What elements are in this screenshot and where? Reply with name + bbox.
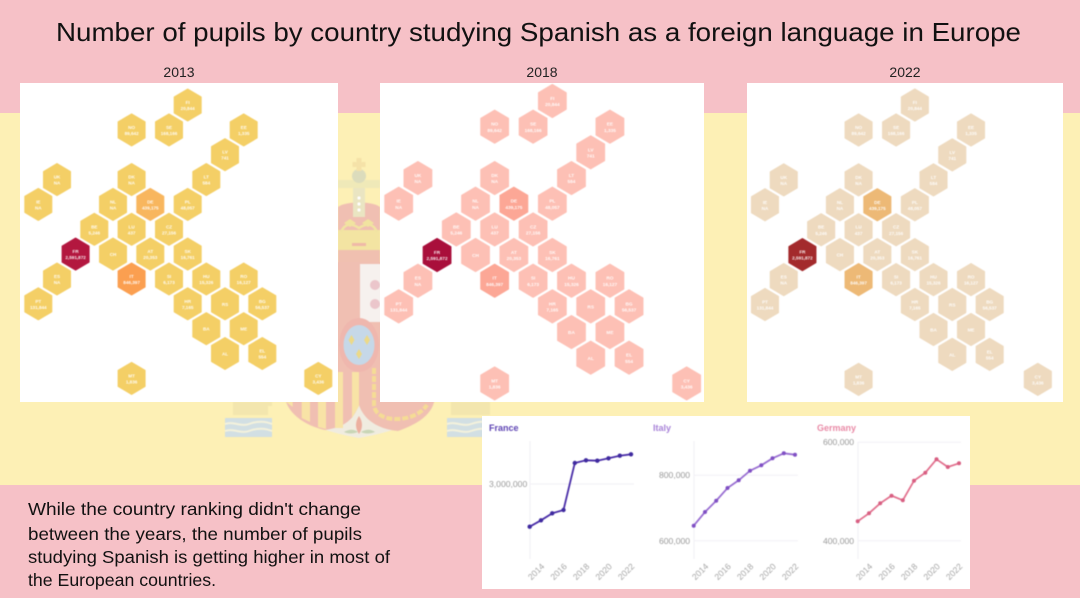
hex map: 2018 — [385, 85, 700, 400]
hex map: 2022: DE — [874, 200, 881, 205]
chart title: France: France — [489, 423, 519, 433]
hex map: 2013: 27,156 — [162, 230, 176, 235]
hex map: 2022: 1,836 — [853, 380, 865, 385]
hex map: 2022: ES — [781, 275, 787, 280]
hex map: 2018: 437 — [491, 231, 499, 237]
hex map: 2013: BA — [203, 327, 210, 332]
hex map: 2018: LU — [492, 224, 498, 230]
hex map: 2022: BG — [986, 300, 994, 305]
x axis labels: Italy: 2016 — [712, 561, 733, 582]
hex map: 2022: 741 — [948, 156, 957, 161]
hex map: 2022: ME — [968, 328, 974, 333]
hex map: 2018: NA — [415, 282, 422, 288]
hex map: 2013: 1,335 — [238, 131, 250, 136]
hex map: 2022: AT — [874, 250, 880, 255]
hex map: 2022: HU — [930, 275, 937, 280]
hex map: 2022: SI — [894, 275, 898, 280]
title: Number of pupils by country studying Spanish as a foreign language in Europe — [56, 17, 1021, 47]
hex map: 2022: 89,642 — [852, 131, 866, 136]
hex map: 2018: 439,175 — [505, 205, 523, 211]
hex map: 2013: 15,326 — [199, 280, 214, 285]
hex map: 2022: IE — [763, 200, 767, 205]
hex map: 2013: 554 — [258, 354, 267, 360]
hex map: 2022: 6,173 — [890, 281, 902, 286]
hex map: 2022: 16,761 — [908, 256, 922, 261]
hex map: 2022: NA — [855, 181, 863, 186]
hex map: 2018: CH — [472, 253, 480, 259]
watermark: Spanish coat of arms — [225, 158, 494, 438]
chart: Germany — [817, 423, 965, 582]
axis label: 600,000: 600,000 — [659, 536, 690, 546]
hex map: 2018: 584 — [568, 179, 576, 185]
hex map: 2022 — [752, 89, 1051, 395]
text block: conclusion: between the years, the number of pupils — [28, 524, 362, 544]
hex map: 2013: NA — [110, 205, 117, 210]
hex map: 2018: NL — [472, 199, 479, 205]
x axis labels: Italy — [690, 561, 801, 582]
hex map: 2018: 56,537 — [622, 308, 637, 314]
hex map: 2022: 2,591,872 — [792, 256, 813, 261]
x axis labels: France: 2022 — [616, 561, 637, 582]
hex map: 2022: AL — [949, 352, 956, 357]
panel: 2018 background — [380, 83, 704, 402]
hex map: 2022: 15,326 — [926, 281, 941, 286]
hex map: 2018: SI — [531, 276, 535, 282]
axis label: 800,000: 800,000 — [659, 470, 690, 480]
hex map: 2013: 741 — [221, 156, 229, 161]
hex map: 2022: LU — [856, 225, 862, 230]
hex map: 2018: AL — [588, 356, 594, 362]
axis label: 3,000,000: 3,000,000 — [489, 479, 527, 489]
hex map: 2018: LV — [588, 147, 594, 153]
hex map: 2022: EL — [987, 349, 993, 354]
hex map: 2013: 1,836 — [126, 379, 138, 384]
hex map: 2013: NA — [54, 181, 61, 186]
axis label: 600,000: 600,000 — [823, 437, 854, 447]
hex map: 2013: RS — [222, 302, 228, 307]
hex map: 2013: SE — [166, 125, 172, 130]
hex map: 2018: 48,057 — [545, 205, 560, 211]
hex map: 2022: 584 — [930, 181, 938, 186]
hex map: 2018: 20,844 — [545, 102, 560, 108]
hex map: 2018: FR — [434, 250, 441, 256]
hex map: 2018: 16,761 — [545, 256, 560, 262]
hex map: 2022: PL — [912, 200, 918, 205]
hex map: 2018: NA — [395, 205, 403, 211]
hex map: 2022: LV — [949, 150, 956, 155]
hex map: 2022: DK — [855, 175, 863, 180]
hex map: 2013: ME — [240, 327, 247, 332]
hex map: 2022: MT — [855, 374, 862, 379]
hex map: 2022: 27,156 — [889, 231, 904, 236]
hex map: 2018: DE — [511, 199, 517, 205]
hex map: 2022: 20,353 — [870, 256, 885, 261]
hex map: 2018: EL — [626, 353, 632, 359]
hex map: 2018: CY — [683, 378, 691, 384]
hex map: 2018: BE — [453, 224, 460, 230]
hex map: 2022: 131,844 — [757, 306, 774, 311]
hex map: 2022: NA — [780, 281, 788, 286]
x axis labels: Italy: 2018 — [735, 561, 756, 582]
hex map: 2013: 439,175 — [142, 205, 159, 210]
x axis labels: Germany: 2014 — [854, 561, 875, 582]
hex map: 2022: RS — [949, 303, 955, 308]
hex map: 2013: PT — [35, 299, 41, 304]
hex map: 2013: CH — [110, 252, 117, 257]
hex map: 2022: NA — [762, 206, 769, 211]
hex map: 2018: NA — [491, 179, 499, 185]
hex map: 2018: BG — [626, 301, 633, 307]
hex map: 2013: RO — [240, 274, 248, 279]
pomegranate tip — [356, 416, 362, 434]
hex map: 2022: EE — [968, 125, 974, 130]
hex map: 2018: IE — [396, 199, 401, 205]
line: Italy series — [692, 451, 797, 528]
hex map: 2013: 3,436 — [313, 379, 324, 384]
hex map: 2013: CZ — [166, 224, 172, 229]
hex map: 2022: 439,175 — [869, 206, 886, 211]
centre oval — [339, 318, 379, 372]
chart title: Italy: Italy — [653, 423, 671, 433]
hex map: 2022: 1,335 — [965, 131, 977, 136]
hex map: 2018: LT — [569, 173, 574, 179]
hex map: 2018: 1,836 — [489, 385, 501, 391]
hex map: 2018: IT — [493, 276, 497, 282]
hex map: 2013: 584 — [202, 181, 211, 186]
hex map: 2013: IE — [36, 199, 40, 204]
hex map: 2018: 741 — [587, 153, 595, 160]
hex map: 2013: SK — [185, 249, 192, 254]
hex map: 2022: NA — [780, 181, 788, 186]
panel: 2013 background — [20, 83, 338, 402]
hex map: 2013: NO — [128, 125, 135, 130]
hex map: 2013: BG — [259, 299, 266, 304]
hex map: 2013: 2,591,872 — [65, 255, 86, 260]
x axis labels: Italy: 2022 — [780, 561, 801, 582]
hex map: 2022: CY — [1035, 374, 1041, 379]
hex map: 2018: UK — [415, 173, 422, 179]
x axis labels: Italy: 2020 — [757, 561, 778, 582]
heading: 2018: 2018 — [526, 64, 558, 80]
hex map: 2018: EE — [607, 122, 613, 128]
hex map: 2013: 846,397 — [123, 280, 140, 285]
shield outline — [285, 262, 435, 438]
hex map: 2022: 168,166 — [888, 131, 905, 136]
x axis labels: Germany: 2020 — [921, 561, 942, 582]
hex map: 2022: FI — [913, 100, 917, 105]
hex map: 2018: 3,436 — [681, 385, 693, 391]
hex map: 2022: IT — [857, 275, 861, 280]
hex map: 2018: 1,335 — [604, 128, 616, 134]
hex map: 2013: CY — [315, 373, 321, 378]
hex map: 2013: 48,057 — [181, 205, 195, 210]
hex map: 2018: ME — [606, 330, 613, 336]
hex map: 2022: 56,537 — [983, 306, 997, 311]
hex map: 2013: LU — [129, 224, 135, 229]
hex map: 2013: 16,127 — [237, 280, 251, 285]
hex map: 2013: DK — [128, 175, 136, 180]
x axis labels: Germany: 2016 — [876, 561, 897, 582]
chart: France — [489, 423, 637, 582]
hex map: 2013: 7,165 — [182, 305, 194, 310]
hex map: 2018: FI — [550, 96, 554, 102]
hex map: 2013: NA — [35, 205, 42, 210]
hex map: 2022: 3,436 — [1032, 380, 1044, 385]
right pillar base — [451, 402, 490, 415]
hex map: 2022: PT — [762, 300, 768, 305]
hex map: 2013: PL — [185, 199, 191, 204]
hex map: 2018: 2,591,872 — [427, 256, 448, 262]
x axis labels: Germany — [854, 561, 965, 582]
hex map: 2013: 56,537 — [255, 305, 270, 310]
hex map: 2022: 5,246 — [815, 231, 827, 236]
hex map: 2013: DE — [147, 199, 153, 204]
hex map: 2022: 48,057 — [908, 206, 922, 211]
hex map: 2018: 168,166 — [525, 128, 542, 134]
hex map: 2022: 437 — [855, 231, 863, 236]
line: France series — [528, 452, 633, 529]
hex map: 2013: 131,844 — [30, 305, 47, 310]
panel: 2022 background — [747, 83, 1063, 402]
hex map: 2018: NA — [472, 205, 480, 211]
hex map: 2018: HU — [568, 276, 575, 282]
hex map: 2018: 7,165 — [546, 308, 559, 314]
x axis labels: Germany: 2022 — [944, 561, 965, 582]
hex map: 2018: BA — [568, 330, 575, 336]
text block: conclusion: studying Spanish is getting higher in most of — [28, 547, 390, 567]
hex map: 2018: DK — [491, 173, 499, 179]
hex map: 2013: AT — [147, 249, 153, 254]
left pillar base — [233, 402, 272, 415]
hex map: 2013: 5,246 — [89, 230, 100, 235]
hex map: 2022: 7,165 — [909, 306, 921, 311]
hex map: 2013: 16,761 — [181, 255, 195, 260]
hex map: 2013: EL — [259, 348, 265, 354]
x axis labels: France — [526, 561, 637, 582]
x axis labels: France: 2018 — [571, 561, 592, 582]
hex map: 2013: LT — [204, 175, 209, 180]
shield left stripes — [285, 262, 359, 430]
hex map: 2013: 437 — [128, 230, 136, 235]
x axis labels: Italy: 2014 — [690, 561, 711, 582]
hex map: 2018: 5,246 — [450, 231, 463, 237]
hex map: 2018: SE — [530, 122, 536, 128]
hex map: 2013: 6,173 — [163, 280, 175, 285]
x axis labels: Germany: 2018 — [899, 561, 920, 582]
hex map: 2018: 27,156 — [526, 231, 541, 237]
hex map: 2022: NO — [855, 125, 862, 130]
hex map: 2018: ES — [415, 276, 421, 282]
x axis labels: France: 2014 — [526, 561, 547, 582]
hex map: 2018: HR — [549, 301, 556, 307]
hex map: 2013: UK — [54, 175, 61, 180]
hex map: 2022: SE — [893, 125, 899, 130]
hex map: 2013: 20,353 — [143, 255, 158, 260]
hex map: 2013: SI — [167, 274, 171, 279]
hex map: 2022: FR — [799, 250, 806, 255]
hex map: 2018: 15,326 — [564, 282, 579, 288]
hex map: 2022: 554 — [986, 355, 994, 360]
hex map: 2022: NA — [837, 206, 844, 211]
hex map: 2013: BE — [91, 224, 97, 229]
heading: 2022: 2022 — [889, 64, 921, 80]
hex map: 2013: NL — [110, 199, 116, 204]
text block: conclusion: the European countries. — [28, 570, 216, 590]
hex map: 2013 — [25, 89, 332, 394]
hex map: 2022: RO — [968, 275, 975, 280]
hex map: 2013: 89,642 — [125, 131, 139, 136]
line: Germany series — [856, 457, 961, 523]
hex map: 2013: 168,166 — [161, 131, 178, 136]
hex map: 2022: 16,127 — [964, 281, 978, 286]
text block: conclusion — [28, 499, 390, 590]
chain — [374, 368, 427, 419]
hex map: 2018: AT — [511, 250, 517, 256]
hex map: 2022: BE — [818, 225, 824, 230]
hex map: 2022: NL — [837, 200, 843, 205]
hex map: 2018: NA — [415, 179, 422, 185]
hex map: 2022: 20,844 — [908, 106, 922, 111]
hex map: 2018: 20,353 — [507, 256, 521, 262]
hex map: 2022: CZ — [893, 225, 899, 230]
white quadrant — [360, 264, 384, 322]
hex map: 2018: 846,397 — [486, 282, 504, 288]
hex map: 2013: HR — [184, 299, 192, 304]
hex map: 2022: SK — [912, 250, 919, 255]
hex map: 2018: RO — [606, 276, 614, 282]
chart title: Germany: Germany — [817, 423, 856, 433]
hex map: 2018: PL — [549, 199, 555, 205]
hex map: 2022: CH — [837, 253, 844, 258]
hex map: 2018: NO — [491, 122, 499, 128]
hex map: 2018: 554 — [625, 359, 633, 365]
hex map: 2013: EE — [241, 125, 247, 130]
orb and cross — [353, 183, 365, 217]
hex map: 2018: 16,127 — [603, 282, 618, 288]
hex map: 2013: 20,844 — [181, 106, 195, 111]
hex map: 2022: 846,397 — [850, 281, 867, 286]
hex map: 2022: UK — [780, 175, 788, 180]
panel: line charts background — [482, 416, 970, 589]
hex map: 2022: LT — [931, 175, 936, 180]
hex map: 2018: 89,642 — [487, 128, 502, 134]
x axis labels: France: 2020 — [593, 561, 614, 582]
hex map: 2013: ES — [54, 274, 60, 279]
hex map: 2022: HR — [912, 300, 919, 305]
hex map: 2022: BA — [930, 328, 937, 333]
hex map: 2018: MT — [491, 378, 498, 384]
axis label: 400,000: 400,000 — [823, 536, 854, 546]
heading: 2013: 2013 — [163, 64, 195, 80]
hex map: 2013: FI — [186, 100, 190, 105]
hex map: 2013: NA — [128, 181, 136, 186]
hex map: 2018: PT — [396, 301, 402, 307]
hex map: 2018: SK — [549, 250, 556, 256]
hex map: 2013: AL — [222, 352, 228, 356]
hex map: 2018: RS — [587, 304, 594, 310]
chart: Italy — [653, 423, 801, 582]
crown — [338, 202, 380, 232]
hex map: 2013: LV — [222, 150, 229, 155]
shield right quadrant — [359, 262, 435, 431]
hex map: 2018: 131,844 — [390, 308, 408, 314]
hex map: 2013: NA — [54, 280, 61, 285]
x axis labels: France: 2016 — [548, 561, 569, 582]
hex map: 2013: HU — [203, 274, 210, 279]
hex map: 2018: 6,173 — [527, 282, 539, 288]
text block: conclusion: While the country ranking didn't change — [28, 499, 361, 519]
hex map: 2013: IT — [130, 274, 134, 279]
hex map: 2013: FR — [73, 249, 79, 254]
hex map: 2018: CZ — [530, 224, 536, 230]
hex map: 2013: MT — [128, 373, 135, 378]
